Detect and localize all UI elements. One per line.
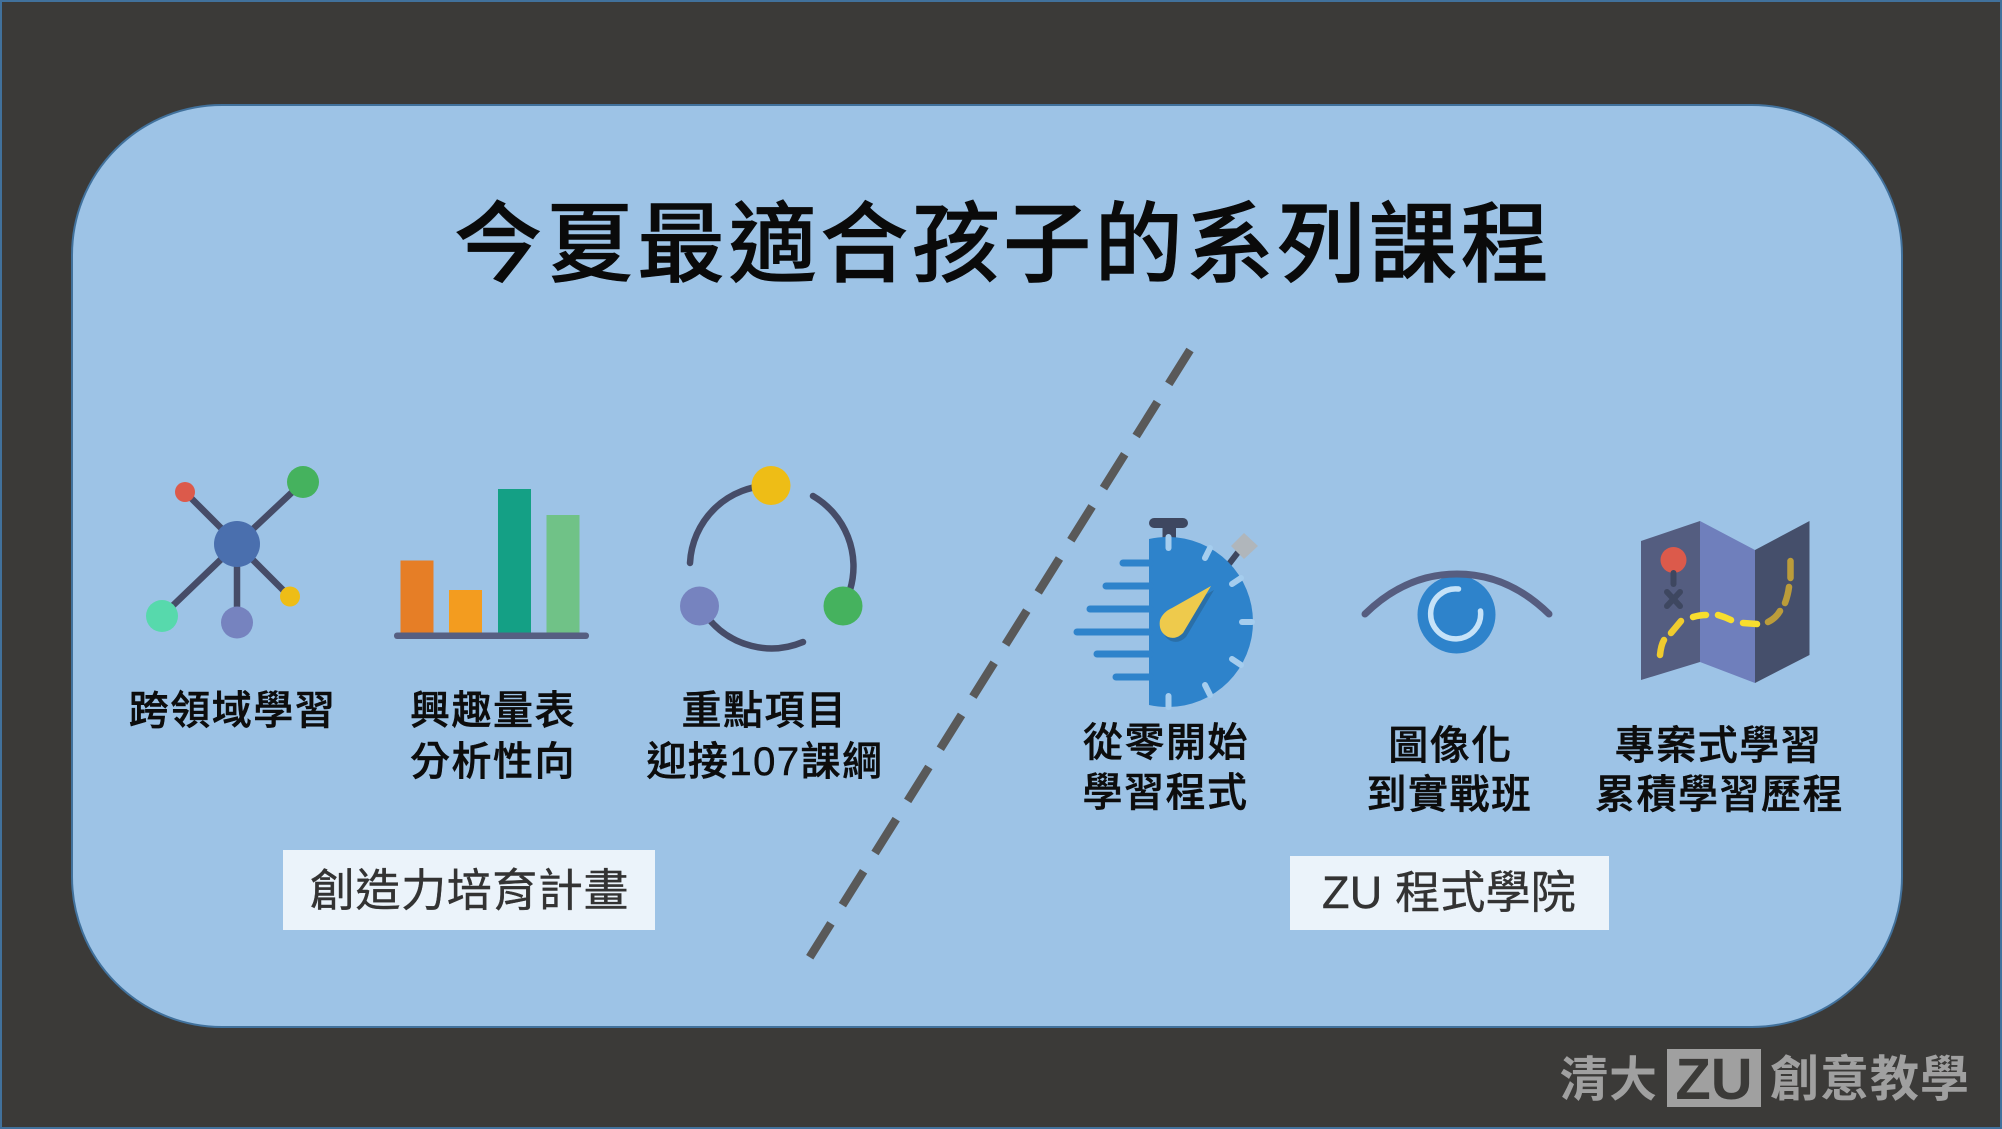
- label: 從零開始 學習程式: [1082, 721, 1249, 815]
- icon: stopwatch: [1077, 518, 1258, 707]
- label: 圖像化 到實戰班: 圖像化: [1388, 724, 1513, 768]
- label: 興趣量表 分析性向: 分析性向: [410, 740, 576, 784]
- logo: 清大 ZU 創意教學: ZU: [1675, 1047, 1753, 1112]
- icon: network nodes: [146, 466, 319, 638]
- callout: 創造力培育計畫: 創造力培育計畫: [310, 865, 629, 916]
- divider: dashed diagonal line: [810, 350, 1190, 958]
- label: 圖像化 到實戰班: 到實戰班: [1366, 773, 1532, 817]
- title: 今夏最適合孩子的系列課程: [454, 195, 1552, 294]
- panel: rounded blue card: [72, 105, 1902, 1027]
- icon: folded map: [1641, 521, 1810, 683]
- label: 重點項目 迎接107課綱: [646, 689, 884, 784]
- label: 專案式學習 累積學習歷程: [1595, 724, 1844, 817]
- label: 重點項目 迎接107課綱: 迎接107課綱: [646, 740, 884, 784]
- label: 興趣量表 分析性向: 興趣量表: [410, 689, 576, 733]
- icon: eye: [1365, 574, 1549, 654]
- callout: ZU 程式學院: ZU 程式學院: [1322, 867, 1576, 918]
- label: 專案式學習 累積學習歷程: 專案式學習: [1615, 724, 1822, 768]
- logo: 清大 ZU 創意教學: 創意教學: [1770, 1053, 1970, 1107]
- icon: cycle of three nodes: [680, 466, 862, 648]
- callout: ZU 程式學院: [1290, 856, 1609, 930]
- callout: 創造力培育計畫: [283, 850, 655, 930]
- icon: bar chart: [394, 489, 589, 639]
- label: 專案式學習 累積學習歷程: 累積學習歷程: [1595, 773, 1844, 817]
- logo: 清大 ZU 創意教學: 清大: [1560, 1054, 1658, 1107]
- label: 興趣量表 分析性向: [410, 689, 576, 784]
- label: 從零開始 學習程式: 從零開始: [1083, 721, 1249, 765]
- label: 從零開始 學習程式: 學習程式: [1082, 771, 1248, 815]
- label: 跨領域學習: 跨領域學習: [129, 689, 336, 733]
- logo: 清大 ZU 創意教學: [1560, 1047, 1970, 1112]
- label: 重點項目 迎接107課綱: 重點項目: [682, 689, 848, 733]
- label: 圖像化 到實戰班: [1366, 724, 1532, 817]
